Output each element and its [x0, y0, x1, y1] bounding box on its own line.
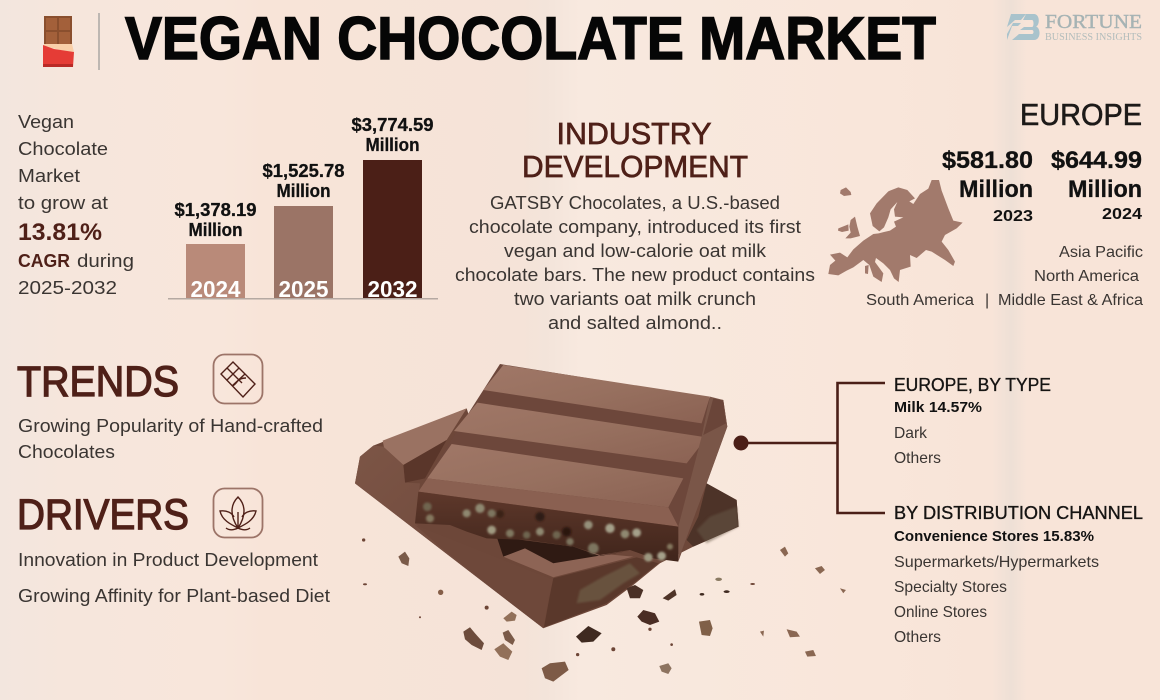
text block: drivers [18, 549, 330, 606]
stat: Europe 2023 [942, 147, 1033, 225]
list: by distribution channel: Online Stores [894, 604, 987, 621]
list: Europe by type: Others [894, 450, 941, 467]
text block: industry development body: vegan and low-calorie oat milk [504, 240, 767, 261]
text block: market growth summary: Vegan [18, 111, 74, 132]
chocolate crumbs: right side [760, 547, 846, 657]
text block: drivers: Growing Affinity for Plant-based Diet [18, 585, 330, 606]
stat: Europe 2023: 2023 [993, 208, 1033, 225]
text block: industry development body: and salted almond.. [548, 312, 722, 333]
list: by distribution channel [894, 503, 1143, 646]
stat: Europe 2024: 2024 [1102, 206, 1142, 223]
list: other regions: South America [866, 292, 974, 309]
list: Europe by type: EUROPE, BY TYPE [894, 375, 1051, 395]
heading: Europe: EUROPE [1020, 97, 1142, 132]
text block: market growth summary: Market [18, 165, 80, 186]
list: Europe by type [894, 375, 1051, 467]
logo: Fortune Business Insights [1007, 11, 1142, 43]
bar: 2024: $1,378.19 [174, 200, 256, 220]
icon: leaves in rounded square [214, 488, 262, 538]
divider [98, 13, 100, 70]
heading: drivers: DRIVERS [17, 491, 189, 539]
list: other regions: | [985, 292, 989, 309]
illustration: chocolate bars and crumbs [355, 364, 846, 682]
list: by distribution channel: BY DISTRIBUTION CHANNEL [894, 503, 1143, 523]
bar: 2025: 2025 [278, 276, 329, 302]
stat: Europe 2024: Million [1068, 176, 1142, 203]
logo: Fortune Business Insights: FORTUNE [1045, 11, 1142, 33]
map: Europe [828, 180, 963, 282]
list: other regions: North America [1034, 268, 1139, 285]
lower chocolate bar [355, 408, 739, 628]
bar chart: market size [168, 115, 438, 302]
text block: market growth summary: to grow at [18, 192, 108, 213]
upper chocolate bar [415, 364, 739, 603]
heading: industry development: INDUSTRY [556, 116, 712, 151]
text block: industry development body: GATSBY Chocolates, a U.S.-based [490, 192, 780, 213]
bar: 2025: Million [276, 181, 330, 201]
chocolate crumbs [362, 538, 755, 682]
list: other regions [866, 244, 1143, 309]
heading: trends: TRENDS [17, 358, 179, 406]
text block: trends: Growing Popularity of Hand-crafted [18, 415, 323, 436]
text block: drivers: Innovation in Product Development [18, 549, 318, 570]
text block: industry development body: chocolate bars. The new product contains [455, 264, 815, 285]
list: Europe by type: Dark [894, 425, 928, 442]
list: by distribution channel: Convenience Stores 15.83% [894, 528, 1094, 545]
list: Europe by type: Milk 14.57% [894, 399, 982, 416]
text block: market growth summary: Chocolate [18, 138, 108, 159]
icon: chocolate bar [43, 16, 74, 67]
list: other regions: Asia Pacific [1059, 244, 1143, 261]
stat: Europe 2023: $581.80 [942, 147, 1033, 174]
bar: 2032: Million [366, 135, 420, 155]
list: by distribution channel: Others [894, 629, 941, 646]
text block: market growth summary: 2025-2032 [18, 277, 117, 298]
text block: market growth summary: CAGR [18, 250, 70, 271]
logo: Fortune Business Insights: BUSINESS INSIGHTS [1045, 32, 1142, 43]
text block: industry development body [455, 192, 815, 333]
bar: 2024 [174, 200, 256, 302]
connector: bracket with dot [734, 383, 885, 513]
stat: Europe 2024: $644.99 [1051, 147, 1142, 174]
text block: market growth summary: during [77, 250, 134, 271]
title: VEGAN CHOCOLATE MARKET [125, 5, 936, 72]
bar: 2025 [262, 161, 344, 302]
stat: Europe 2023: Million [959, 176, 1033, 203]
bar: 2032: $3,774.59 [352, 115, 434, 135]
text block: market growth summary [18, 111, 134, 298]
list: other regions: Middle East & Africa [998, 292, 1143, 309]
bar: 2024: 2024 [190, 276, 241, 302]
icon: chocolate in rounded square [214, 354, 262, 404]
bar: 2032: 2032 [368, 276, 418, 302]
bar: 2032 [352, 115, 434, 302]
text block: trends [18, 415, 323, 462]
list: by distribution channel: Supermarkets/Hypermarkets [894, 554, 1099, 571]
text block: industry development body: chocolate company, introduced its first [469, 216, 801, 237]
text block: trends: Chocolates [18, 441, 115, 462]
list: by distribution channel: Specialty Stores [894, 579, 1007, 596]
text block: market growth summary: 13.81% [18, 219, 102, 246]
bar: 2025: $1,525.78 [262, 161, 344, 181]
bar: 2024: Million [188, 220, 242, 240]
stat: Europe 2024 [1051, 147, 1142, 223]
text block: industry development body: two variants oat milk crunch [514, 288, 756, 309]
heading: industry development: DEVELOPMENT [522, 149, 748, 184]
heading: industry development [522, 116, 748, 184]
crisped rice in broken edge [423, 502, 673, 562]
